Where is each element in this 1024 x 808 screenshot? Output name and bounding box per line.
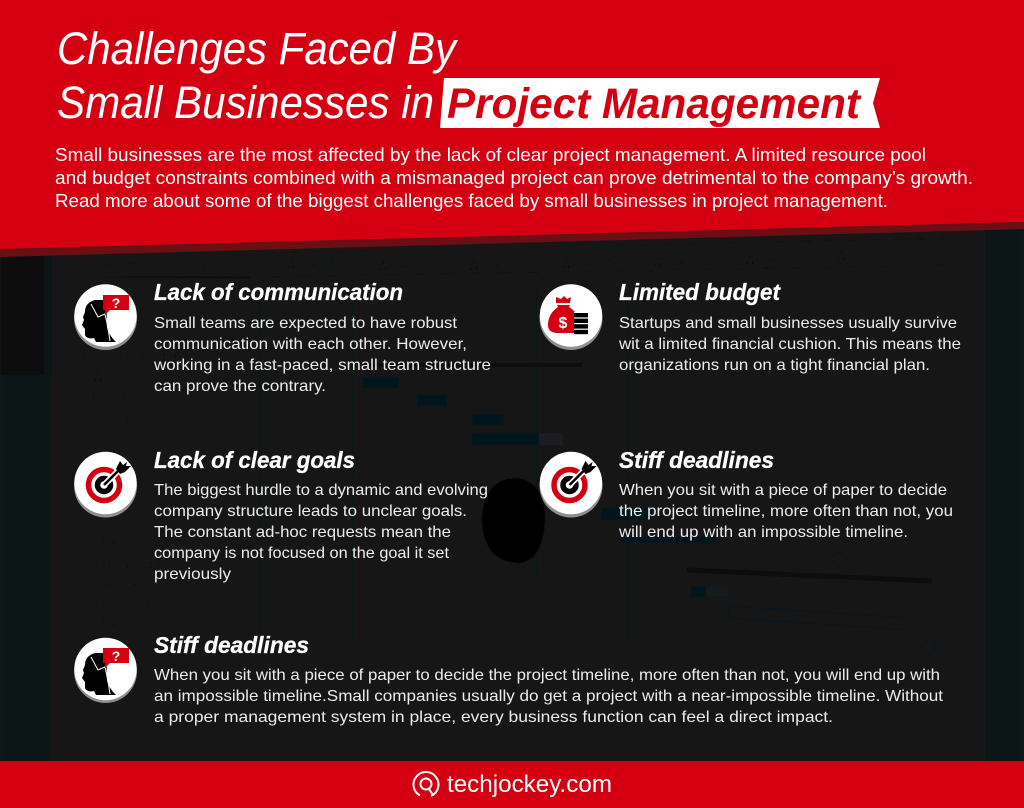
intro paragraph: Read more about some of the biggest challenges faced by small businesses in project management. bbox=[55, 191, 888, 211]
body text: an impossible timeline.Small companies usually do get a project with a near-impossible timeline. Without bbox=[154, 688, 944, 705]
heading: Lack of clear goals bbox=[154, 447, 355, 473]
body text: When you sit with a piece of paper to decide bbox=[619, 482, 947, 499]
body text: Small teams are expected to have robust bbox=[154, 315, 458, 332]
gantt labels: Progress bbox=[203, 263, 256, 278]
gantt labels: Week 02 bbox=[377, 258, 428, 273]
gantt labels: Executing bbox=[102, 535, 159, 550]
title highlight banner bbox=[440, 78, 880, 128]
gantt labels: Subtask 2 bbox=[92, 576, 150, 591]
icon: head with question bubble: ? bbox=[112, 295, 120, 311]
body text: The constant ad-hoc requests mean the bbox=[154, 524, 451, 541]
gantt labels: Task name bbox=[85, 256, 148, 271]
title bbox=[57, 23, 880, 128]
panel: stiff deadlines (right) bbox=[540, 447, 953, 541]
body text: wit a limited financial cushion. This means the bbox=[618, 336, 961, 353]
intro paragraph: Small businesses are the most affected by the lack of clear project management. A limited resource pool bbox=[55, 145, 926, 165]
title: Project Management bbox=[447, 80, 862, 128]
body text: The biggest hurdle to a dynamic and evolving bbox=[154, 482, 488, 499]
gantt labels: Deliverables bbox=[102, 556, 174, 571]
gantt labels: Schedule bbox=[92, 410, 146, 425]
heading: Lack of communication bbox=[154, 279, 403, 305]
body text bbox=[618, 315, 961, 374]
body text bbox=[618, 482, 953, 541]
person silhouette bbox=[415, 478, 622, 761]
gantt labels: Week 06 bbox=[744, 252, 795, 267]
body text: can prove the contrary. bbox=[154, 378, 326, 395]
heading: Stiff deadlines bbox=[154, 632, 309, 658]
gantt labels: Week 04 bbox=[560, 256, 611, 271]
title: Small Businesses in bbox=[57, 77, 434, 128]
body text bbox=[153, 315, 491, 395]
heading: Limited budget bbox=[619, 279, 781, 305]
icon: techjockey logo bbox=[414, 772, 439, 796]
footer band bbox=[0, 761, 1024, 808]
header red panel bbox=[0, 0, 1024, 257]
icon: head with question bubble: ? bbox=[112, 648, 120, 664]
gantt labels: Week 01 bbox=[285, 256, 336, 271]
brand name: techjockey.com bbox=[447, 771, 612, 798]
body text: Startups and small businesses usually survive bbox=[619, 315, 957, 332]
intro paragraph: and budget constraints combined with a mismanaged project can prove detrimental to the company’s growth. bbox=[55, 168, 973, 188]
title: Challenges Faced By bbox=[57, 23, 458, 74]
gantt labels: Executing bbox=[102, 616, 159, 631]
icon: head with question bubble bbox=[74, 284, 137, 350]
body text: will end up with an impossible timeline. bbox=[618, 524, 908, 541]
gantt labels: Resources bbox=[92, 389, 155, 404]
gantt labels: Week 07 bbox=[835, 248, 886, 263]
body text: When you sit with a piece of paper to decide the project timeline, more often than not, you will end up with bbox=[154, 667, 940, 684]
icon: target with arrow bbox=[540, 452, 602, 518]
icon: target with arrow bbox=[74, 452, 137, 518]
panel: lack of clear goals bbox=[74, 447, 488, 583]
gantt labels: WBS bbox=[92, 369, 122, 384]
gantt labels bbox=[82, 248, 886, 631]
body text bbox=[154, 482, 488, 583]
gantt labels: Week 05 bbox=[652, 254, 703, 269]
body text: company is not focused on the goal it set bbox=[154, 545, 450, 562]
icon: money bag with coins: $ bbox=[559, 315, 568, 332]
body text: communication with each other. However, bbox=[154, 336, 467, 353]
body text: company structure leads to unclear goals. bbox=[154, 503, 467, 520]
intro paragraph bbox=[55, 145, 973, 211]
panel: lack of communication bbox=[74, 279, 491, 395]
body text: previously bbox=[154, 566, 231, 583]
body text: a proper management system in place, every business function can feel a direct impact. bbox=[154, 709, 833, 726]
body text: the project timeline, more often than not, you bbox=[619, 503, 953, 520]
heading: Stiff deadlines bbox=[619, 447, 774, 473]
icon: money bag with coins bbox=[540, 284, 602, 350]
gantt labels: Initiating bbox=[102, 597, 150, 612]
body text: organizations run on a tight financial plan. bbox=[619, 357, 930, 374]
panel: limited budget bbox=[540, 279, 961, 374]
gantt labels: Project Planning bbox=[82, 348, 177, 363]
body text bbox=[154, 667, 944, 726]
panel: stiff deadlines (bottom) bbox=[74, 632, 944, 726]
body text: working in a fast-paced, small team structure bbox=[153, 357, 491, 374]
icon: head with question bubble bbox=[74, 638, 137, 703]
gantt labels: Week 03 bbox=[468, 258, 519, 273]
gantt labels: Costs bbox=[92, 430, 126, 445]
